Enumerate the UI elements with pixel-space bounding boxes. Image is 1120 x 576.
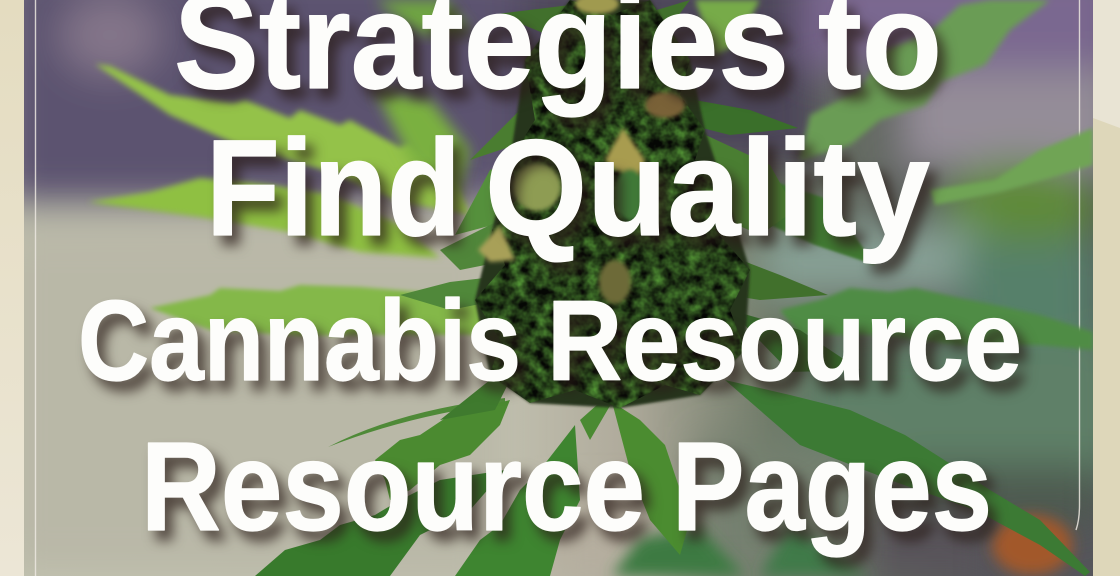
orange blur bottom right <box>992 515 1072 575</box>
title line 4 <box>141 416 992 557</box>
right beige strip <box>1093 0 1120 576</box>
leaf: bottom centre left <box>455 425 580 576</box>
bud side leaves <box>400 0 860 440</box>
leaf: lower left <box>150 285 500 336</box>
bud flowers <box>478 0 685 304</box>
leaf: bottom centre blur <box>612 528 745 576</box>
leaf: upper centre right <box>695 0 760 55</box>
title line 4: Resource <box>141 416 645 557</box>
title line 3 <box>78 278 1022 405</box>
leaf: upper left <box>95 64 470 215</box>
leaf: bottom left long <box>255 470 505 576</box>
leaf: upper right <box>800 0 1050 160</box>
leaf: right edge <box>930 128 1093 205</box>
title line 2 <box>206 112 930 265</box>
leaf: bottom centre right <box>612 402 690 555</box>
leaf: top behind letters <box>375 0 470 35</box>
title line 2: Find <box>206 112 461 265</box>
title line 3: Resource <box>547 278 1022 405</box>
title line 2: Quality <box>485 112 930 265</box>
bud body <box>475 0 750 408</box>
title line 3: Cannabis <box>78 278 521 405</box>
left beige strip <box>0 0 24 576</box>
leaf: bottom left stem <box>328 398 505 447</box>
leaf: upper left inner <box>375 90 470 200</box>
leaf: mid right <box>780 288 1093 350</box>
leaf: bottom left upper <box>375 400 510 500</box>
leaf: behind ity <box>770 180 875 265</box>
title line 4: Pages <box>672 416 992 557</box>
cannabis bud <box>400 0 860 440</box>
sharp foreground leaves <box>255 380 1090 576</box>
bud texture <box>475 0 750 408</box>
leaf: mid left <box>88 178 440 258</box>
leaf: bottom far right blur <box>760 525 870 576</box>
leaf: lower right long <box>725 380 1090 576</box>
